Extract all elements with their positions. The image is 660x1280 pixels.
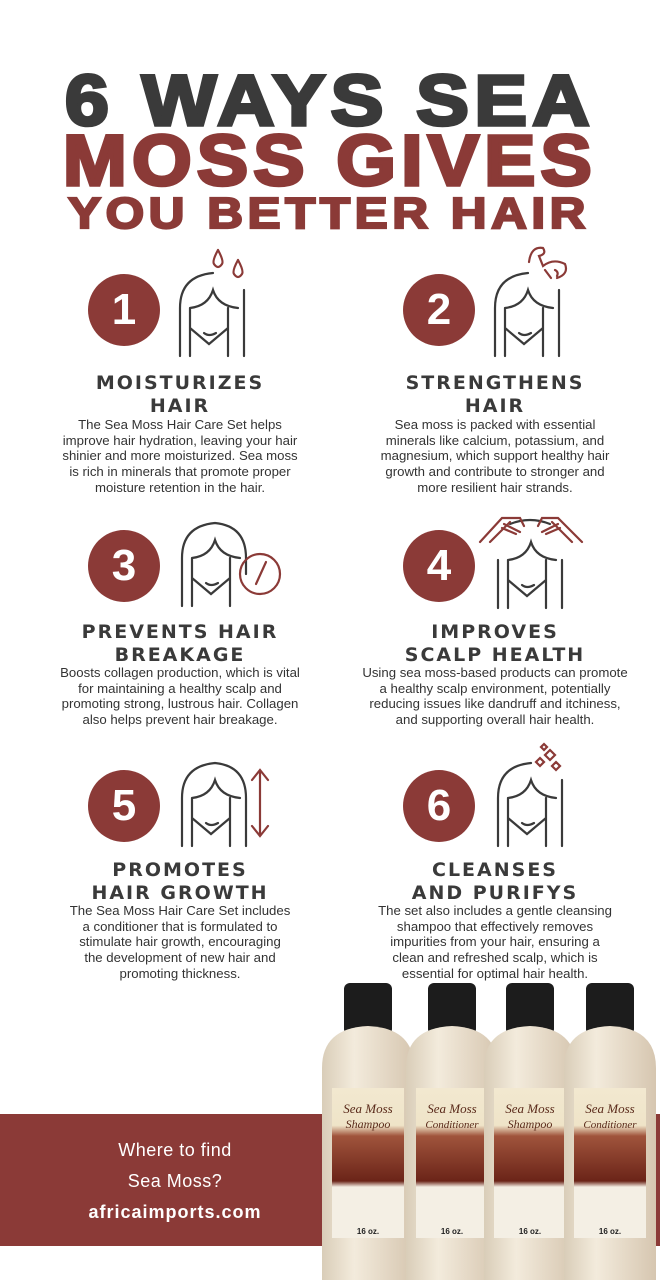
- product bottles: [322, 983, 656, 1280]
- footer text: [88, 1140, 262, 1222]
- title: [63, 62, 597, 235]
- heading 3: PREVENTS HAIR: [82, 621, 278, 643]
- heading 6: CLEANSES: [432, 859, 558, 881]
- badge 2: [403, 274, 475, 346]
- text 5: [70, 903, 290, 981]
- heading 5: PROMOTES: [112, 859, 248, 881]
- icon: head 3: [182, 523, 280, 606]
- badge 3: 3: [112, 541, 136, 590]
- footer text: africaimports.com: [88, 1202, 262, 1222]
- text 5: The Sea Moss Hair Care Set includes: [70, 903, 290, 918]
- footer text: Where to find: [118, 1140, 232, 1160]
- text 6: impurities from your hair, ensuring a: [390, 934, 600, 949]
- text 1: moisture retention in the hair.: [95, 480, 265, 495]
- text 2: Sea moss is packed with essential: [395, 417, 595, 432]
- text 3: also helps prevent hair breakage.: [82, 712, 278, 727]
- text 2: [381, 417, 610, 495]
- text 4: Using sea moss-based products can promote: [362, 665, 628, 680]
- badge 2: 2: [427, 285, 451, 334]
- footer text: Sea Moss?: [128, 1171, 222, 1191]
- badge 5: 5: [112, 781, 136, 830]
- text 5: promoting thickness.: [120, 966, 240, 981]
- text 2: more resilient hair strands.: [417, 480, 573, 495]
- text 4: a healthy scalp environment, potentially: [380, 681, 610, 696]
- text 2: minerals like calcium, potassium, and: [386, 433, 604, 448]
- badge 4: 4: [427, 541, 451, 590]
- heading 5: HAIR GROWTH: [91, 882, 269, 904]
- heading 6: [412, 859, 578, 904]
- icon: head 4: [480, 518, 582, 608]
- product bottles: Conditioner: [583, 1119, 637, 1131]
- product bottles: Conditioner: [425, 1119, 479, 1131]
- footer band: [0, 1114, 660, 1246]
- heading 2: HAIR: [465, 395, 525, 417]
- product bottles: Sea Moss: [585, 1101, 635, 1116]
- text 1: is rich in minerals that promote proper: [69, 464, 291, 479]
- heading 5: [91, 859, 269, 904]
- badge 6: 6: [427, 781, 451, 830]
- badge 6: [403, 770, 475, 842]
- product bottles: Sea Moss: [343, 1101, 393, 1116]
- text 4: and supporting overall hair health.: [396, 712, 594, 727]
- icon: head 1: [180, 250, 244, 356]
- badge 1: 1: [112, 285, 136, 334]
- text 6: essential for optimal hair health.: [402, 966, 588, 981]
- text 2: magnesium, which support healthy hair: [381, 448, 609, 463]
- heading 1: [96, 372, 264, 417]
- text 3: for maintaining a healthy scalp and: [78, 681, 282, 696]
- icon: head 5: [182, 763, 268, 846]
- text 2: growth and contribute to stronger and: [385, 464, 605, 479]
- product bottles: 16 oz.: [357, 1227, 379, 1236]
- text 3: [60, 665, 300, 727]
- title: MOSS GIVES: [63, 122, 597, 201]
- text 4: reducing issues like dandruff and itchiness,: [369, 696, 621, 711]
- heading 1: MOISTURIZES: [96, 372, 264, 394]
- icon: head 2: [495, 248, 566, 356]
- product bottles: 16 oz.: [599, 1227, 621, 1236]
- heading 4: [405, 621, 585, 666]
- text 5: stimulate hair growth, encouraging: [79, 934, 281, 949]
- text 1: The Sea Moss Hair Care Set helps: [78, 417, 282, 432]
- text 3: promoting strong, lustrous hair. Collagen: [62, 696, 298, 711]
- text 4: [362, 665, 628, 727]
- text 1: shinier and more moisturized. Sea moss: [62, 448, 298, 463]
- heading 3: BREAKAGE: [115, 644, 245, 666]
- product bottles: Shampoo: [346, 1117, 390, 1131]
- text 6: shampoo that effectively removes: [397, 919, 593, 934]
- title: 6 WAYS SEA: [65, 62, 595, 141]
- heading 1: HAIR: [150, 395, 210, 417]
- heading 4: SCALP HEALTH: [405, 644, 585, 666]
- heading 6: AND PURIFYS: [412, 882, 578, 904]
- badge 4: [403, 530, 475, 602]
- text 6: The set also includes a gentle cleansing: [378, 903, 612, 918]
- text 1: [62, 417, 298, 495]
- badge 1: [88, 274, 160, 346]
- heading 3: [82, 621, 278, 666]
- icons svg: [178, 246, 584, 848]
- text 6: clean and refreshed scalp, which is: [392, 950, 598, 965]
- badge 5: [88, 770, 160, 842]
- heading 4: IMPROVES: [431, 621, 559, 643]
- text 5: a conditioner that is formulated to: [82, 919, 278, 934]
- icon: head 6: [498, 744, 562, 846]
- product bottles: Sea Moss: [427, 1101, 477, 1116]
- heading 2: [406, 372, 584, 417]
- text 3: Boosts collagen production, which is vital: [60, 665, 300, 680]
- product bottles: 16 oz.: [441, 1227, 463, 1236]
- text 1: improve hair hydration, leaving your hair: [63, 433, 297, 448]
- text 5: the development of new hair and: [84, 950, 276, 965]
- heading 2: STRENGTHENS: [406, 372, 584, 394]
- product bottles: 16 oz.: [519, 1227, 541, 1236]
- text 6: [378, 903, 612, 981]
- product bottles: Shampoo: [508, 1117, 552, 1131]
- product bottles: Sea Moss: [505, 1101, 555, 1116]
- badge 3: [88, 530, 160, 602]
